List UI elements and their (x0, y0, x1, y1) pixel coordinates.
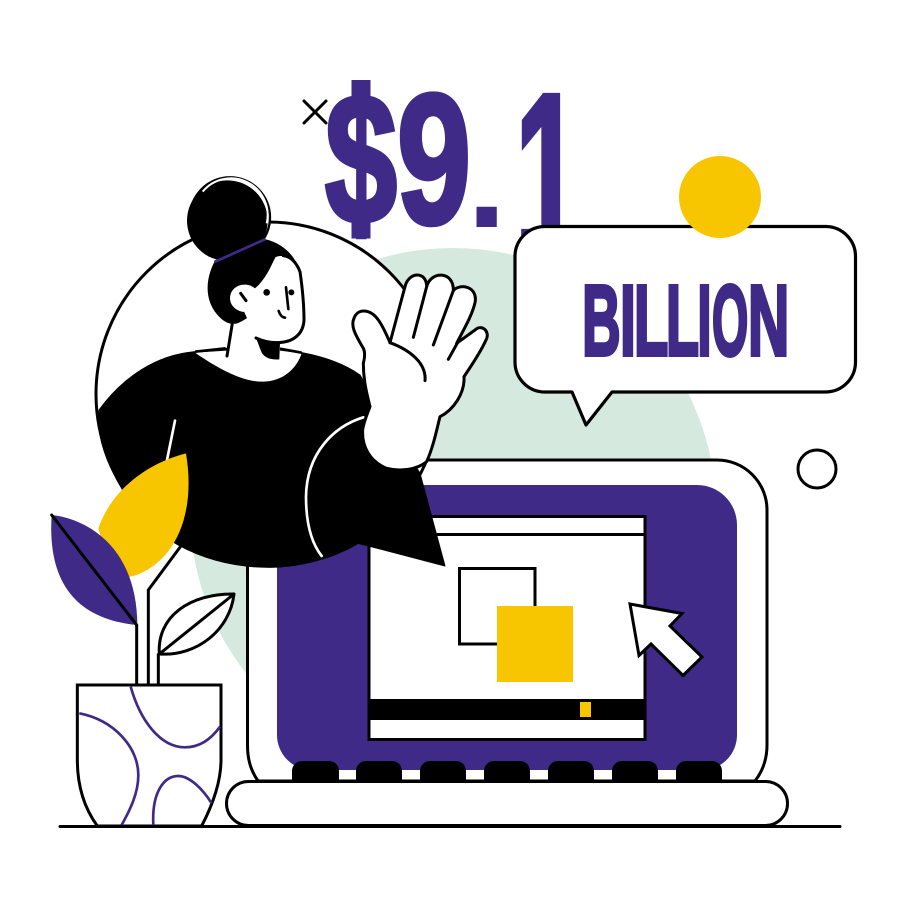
plant pot (77, 685, 221, 826)
plant stems (137, 545, 182, 685)
pot pattern (79, 687, 220, 825)
laptop base (226, 782, 788, 826)
yellow square (497, 606, 573, 682)
heading: BILLION: B (582, 264, 621, 376)
cross mark (304, 101, 326, 123)
hair wisp below ear (227, 307, 243, 322)
laptop body (248, 460, 767, 781)
white leaf (159, 594, 234, 654)
face (243, 256, 304, 343)
background mint circle (190, 248, 716, 774)
progress bar (369, 699, 645, 720)
heading: BILLION: I (620, 265, 636, 377)
heading: BILLION (582, 264, 789, 377)
sleeve lines (167, 417, 363, 556)
yellow circle (679, 156, 761, 238)
portrait circle (96, 222, 440, 566)
heading: $9.1: . (470, 122, 503, 250)
heading: $9.1 (325, 46, 581, 305)
heading: $9.1: 9 (397, 57, 471, 263)
laptop screen (277, 485, 737, 770)
heading: $9.1: $ (325, 55, 397, 262)
heading: BILLION: O (712, 264, 748, 377)
heading: BILLION: L (666, 265, 699, 377)
facial features (263, 287, 294, 318)
neck and collar (195, 320, 302, 382)
hair bun (187, 177, 270, 261)
person (96, 177, 487, 567)
keyboard keys (292, 761, 722, 782)
small outlined circle (798, 450, 836, 488)
yellow leaf (98, 453, 189, 580)
heading: BILLION: N (748, 265, 789, 377)
plant (51, 453, 234, 826)
speech bubble (515, 226, 856, 425)
outlined square (460, 568, 535, 644)
purple leaf (51, 515, 137, 625)
heading: BILLION: I (697, 264, 712, 376)
waving hand (353, 275, 487, 470)
ear (230, 285, 255, 312)
hair (208, 239, 300, 324)
chin shadow (256, 338, 280, 359)
shirt (98, 348, 445, 567)
heading: BILLION: L (634, 266, 668, 377)
ground line (60, 825, 840, 828)
cursor arrow (630, 604, 702, 676)
app window (369, 516, 645, 740)
laptop (226, 460, 788, 826)
heading: $9.1: 1 (515, 46, 581, 305)
hair band (214, 239, 266, 262)
